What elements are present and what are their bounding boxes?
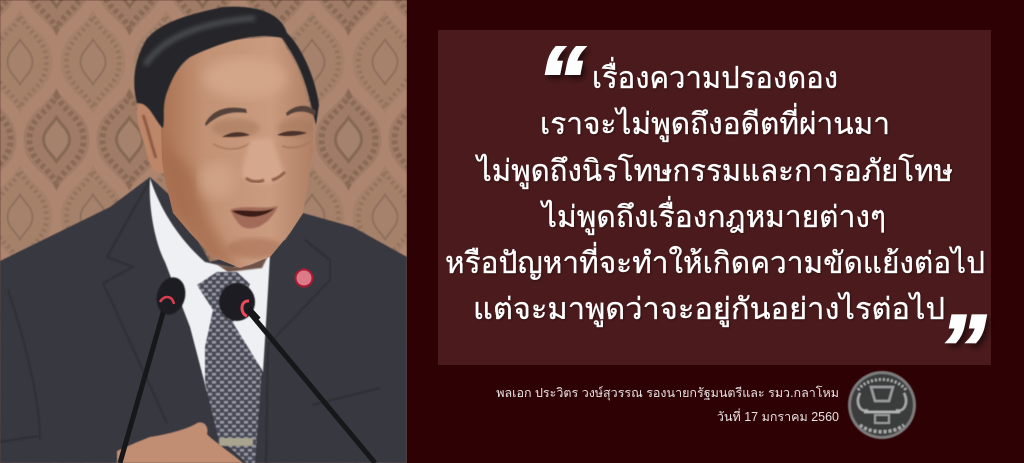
eye socket shading [212, 119, 260, 137]
jacket shading folds [0, 180, 380, 463]
quote line 5: หรือปัญหาที่จะทำให้เกิดความขัดแย้งต่อไป [445, 242, 985, 280]
wallpaper background [0, 0, 407, 463]
attribution [496, 385, 839, 424]
left microphone stem [120, 306, 165, 463]
photo: speaker at microphones [0, 0, 407, 463]
nostril shading [246, 172, 285, 182]
hand [117, 422, 243, 463]
left microphone head [156, 276, 186, 315]
neck shadow [215, 258, 268, 272]
necktie [197, 272, 262, 463]
right microphone head [219, 283, 258, 321]
shirt collar and front [150, 178, 270, 392]
government seal [848, 371, 916, 439]
ear inner shading [143, 115, 156, 158]
right cheek highlight [200, 162, 236, 198]
eyes [222, 131, 307, 137]
hair highlight [145, 18, 255, 65]
chin shading [227, 238, 283, 258]
opening quotation mark: “ [537, 27, 585, 134]
face [161, 37, 313, 268]
seal bowl [871, 387, 893, 401]
eye bags [213, 142, 310, 149]
left cheek and jaw shading [166, 153, 239, 267]
hair [134, 7, 319, 128]
quote line 4: ไม่พูดถึงเรื่องกฎหมายต่างๆ [540, 196, 886, 235]
quote panel [438, 30, 991, 365]
seal top band [858, 380, 906, 390]
quotation text [445, 57, 985, 327]
mouth opening [232, 208, 275, 217]
quote line 1: เรื่องความปรองดอง [592, 57, 838, 95]
seal lower band [860, 425, 904, 432]
date: วันที่ 17 มกราคม 2560 [717, 408, 839, 424]
eyebrows [205, 106, 316, 126]
mouth [230, 206, 278, 229]
seal side figures [858, 393, 906, 411]
nose [242, 138, 284, 184]
right microphone stem [250, 313, 375, 463]
quote line 2: เราจะไม่พูดถึงอดีตที่ผ่านมา [540, 103, 890, 142]
ear [137, 103, 165, 173]
speaker name and title: พลเอก ประวิตร วงษ์สุวรรณ รองนายกรัฐมนตรีและ รมว.กลาโหม [496, 385, 839, 401]
tie clip [219, 438, 253, 446]
jacket [0, 177, 407, 463]
lapel pin [296, 270, 312, 286]
forehead highlight [203, 58, 287, 98]
quote line 3: ไม่พูดถึงนิรโทษกรรมและการอภัยโทษ [475, 153, 953, 189]
seal central bar [864, 411, 900, 413]
closing quotation mark: ” [938, 295, 986, 402]
quote line 6: แต่จะมาพูดว่าจะอยู่กันอย่างไรต่อไป [473, 291, 945, 327]
